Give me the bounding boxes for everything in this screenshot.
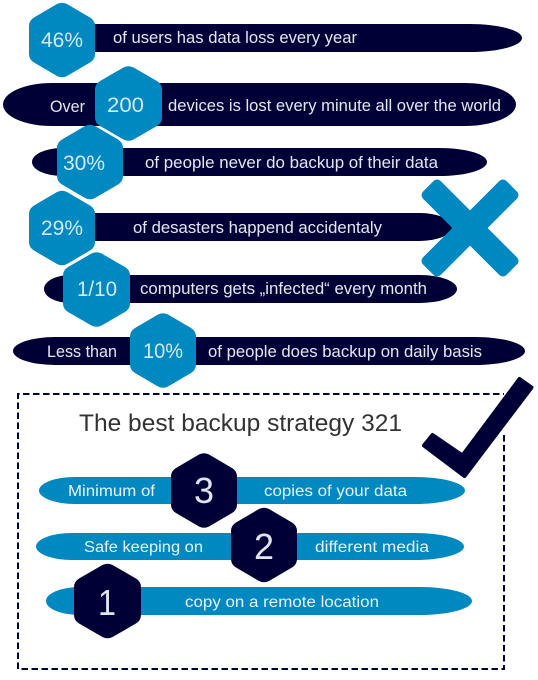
- stat row: less than 10%: of people does backup on daily basis: [208, 343, 482, 361]
- strategy row: 1 remote copy: copy on a remote location: [185, 594, 379, 611]
- stat row: 1/10 computers: computers gets „infected“ every month: [140, 280, 427, 298]
- stat row: 200 devices: 200: [107, 94, 144, 117]
- stat row: 30% of people: [32, 125, 487, 199]
- stat row: 1/10 computers: [44, 252, 457, 327]
- strategy row: 2 media: different media: [315, 539, 429, 556]
- strategy row: 2 media: 2: [254, 526, 274, 567]
- stat row: 30% of people: 30%: [63, 152, 105, 175]
- stat row: 200 devices: Over: [50, 98, 85, 116]
- stat row: less than 10%: [13, 313, 525, 388]
- stat row: 30% of people: of people never do backup of their data: [145, 154, 439, 172]
- strategy row: 3 copies: Minimum of: [68, 483, 156, 500]
- stat row: 1/10 computers: 1/10: [77, 278, 117, 301]
- strategy row: 1 remote copy: 1: [98, 582, 116, 623]
- panel: dashed strategy frame: [18, 394, 504, 669]
- stat row: 200 devices: [3, 66, 516, 141]
- stat row: 29% of desasters: 29%: [41, 217, 83, 240]
- stat row: 29% of desasters: [29, 191, 452, 265]
- stat row: less than 10%: Less than: [47, 343, 117, 361]
- stat row: 46% of users: [29, 3, 522, 77]
- stat row: 46% of users: of users has data loss every year: [113, 29, 358, 47]
- strategy row: 3 copies: 3: [194, 470, 214, 511]
- stat row: 29% of desasters: of desasters happend accidentaly: [133, 219, 383, 237]
- heading: best backup strategy: The best backup strategy 321: [79, 410, 402, 437]
- icon: check mark: [424, 379, 532, 476]
- stat row: less than 10%: 10%: [143, 340, 183, 363]
- strategy row: 1 remote copy: [46, 564, 472, 638]
- stat row: 46% of users: 46%: [41, 29, 83, 52]
- strategy row: 2 media: Safe keeping on: [84, 539, 203, 556]
- strategy row: 3 copies: copies of your data: [264, 483, 407, 500]
- strategy row: 3 copies: [39, 453, 465, 528]
- strategy row: 2 media: [36, 508, 464, 582]
- icon: blue cross: [419, 177, 521, 279]
- stat row: 200 devices: devices is lost every minute all over the world: [168, 97, 501, 115]
